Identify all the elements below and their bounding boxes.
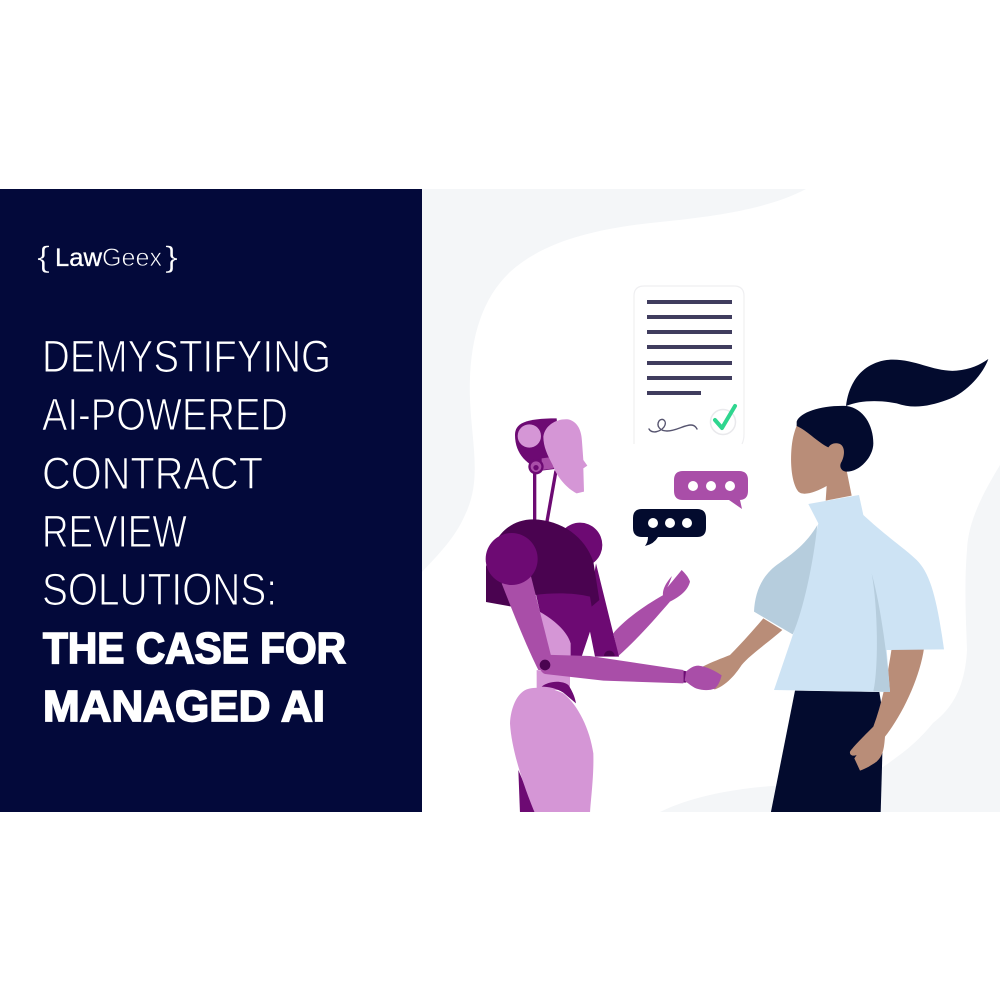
panel: navy title panel	[0, 189, 422, 812]
figure: robot	[486, 418, 722, 813]
robot elbow joints	[540, 651, 615, 670]
panel: illustration background	[422, 189, 1000, 813]
heading: light title lines: REVIEW	[42, 506, 187, 557]
face and neck	[791, 424, 852, 501]
arm: reaching arm	[683, 618, 782, 689]
logo: LawGeex: {	[37, 241, 50, 274]
robot back leg	[518, 770, 534, 812]
signature	[649, 419, 697, 432]
heading: light title lines: DEMYSTIFYING	[42, 331, 331, 382]
robot raised hand	[663, 570, 690, 602]
robot head	[515, 418, 587, 493]
logo: LawGeex: Geex	[102, 244, 162, 272]
robot lower torso	[535, 563, 619, 657]
speech bubble: purple	[674, 471, 748, 509]
robot wrist	[683, 670, 686, 683]
icon: check mark	[710, 406, 736, 434]
robot far arm	[613, 595, 670, 656]
heading: light title lines	[42, 331, 331, 615]
heading: light title lines: CONTRACT	[42, 448, 263, 499]
heading: light title lines: AI-POWERED	[42, 389, 288, 440]
robot chest plate	[486, 519, 599, 607]
robot forearm	[539, 655, 683, 683]
document text lines	[647, 300, 732, 395]
logo: LawGeex: Law	[55, 244, 103, 272]
logo: LawGeex	[37, 241, 178, 274]
background blob: bottom right	[660, 465, 1000, 812]
shirt shadow: fold	[872, 573, 890, 692]
shirt shadow: sleeve	[754, 525, 817, 634]
heading: bold title lines: MANAGED AI	[43, 682, 325, 731]
robot waist ring	[542, 682, 576, 703]
figure: woman	[683, 359, 988, 813]
shirt	[774, 495, 944, 692]
logo: LawGeex: }	[165, 241, 178, 274]
hair	[797, 406, 873, 472]
heading: bold title lines	[43, 624, 346, 731]
arm: hanging arm	[850, 648, 924, 771]
background blob: top left	[422, 189, 806, 572]
ponytail	[846, 359, 988, 406]
robot shaking hand	[685, 666, 722, 690]
robot belly panel	[539, 612, 571, 657]
robot neck rods	[535, 471, 556, 523]
robot hip	[510, 688, 593, 813]
robot upper arm	[502, 575, 552, 672]
document sheet	[634, 286, 744, 444]
document card	[634, 286, 744, 444]
speech bubble: navy	[633, 509, 706, 546]
robot waist	[537, 670, 570, 690]
infographic canvas	[0, 189, 1000, 812]
robot right shoulder	[566, 522, 602, 563]
skirt	[771, 691, 883, 813]
robot left shoulder	[486, 533, 538, 585]
heading: bold title lines: THE CASE FOR	[43, 624, 346, 673]
heading: light title lines: SOLUTIONS:	[42, 564, 277, 615]
